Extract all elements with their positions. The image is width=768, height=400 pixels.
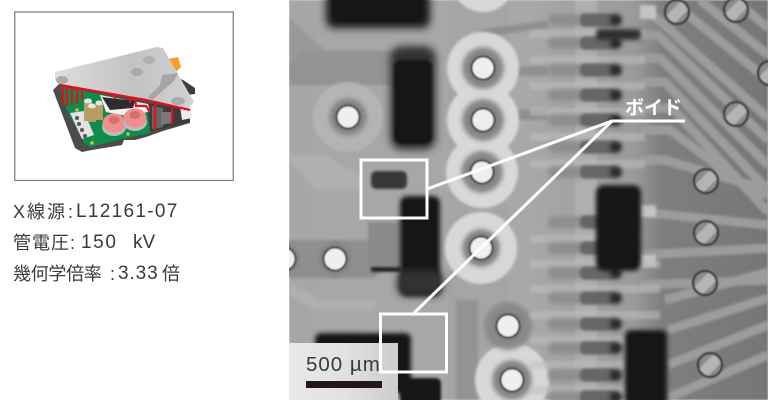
text: tube voltage: 150 [81, 232, 118, 253]
text: x-ray source: 線 [27, 202, 45, 222]
scale bar [306, 381, 382, 388]
solder legs [548, 14, 622, 400]
traces on right [640, 0, 768, 398]
scale label: 500 µm [306, 353, 381, 376]
through holes [270, 54, 526, 394]
text: tube voltage: : [70, 233, 75, 253]
text: geometric magnification: 幾何学倍率 [13, 264, 102, 284]
text: tube voltage: 電 [32, 233, 50, 253]
icon: x-ray source module [53, 47, 195, 152]
text: x-ray source: X [13, 202, 25, 222]
text: x-ray source [13, 201, 179, 222]
scale background [289, 343, 398, 400]
panel: x-ray image [289, 0, 768, 400]
text: geometric magnification: 3.33 [118, 263, 159, 284]
text: x-ray source: 源 [47, 202, 65, 222]
label: void: ボイド [625, 97, 682, 119]
panel: module illustration frame [14, 11, 234, 181]
right side holes [665, 0, 768, 377]
text: geometric magnification: 倍 [162, 264, 180, 284]
pad rings [313, 0, 549, 400]
text: tube voltage [13, 232, 155, 253]
text: tube voltage: kV [133, 232, 155, 253]
x-ray board [270, 0, 768, 400]
dark components [315, 0, 667, 400]
text: geometric magnification: : [110, 264, 115, 284]
horizontal light bands [530, 30, 660, 394]
text: tube voltage: 圧 [51, 233, 69, 253]
callout: void boxes and leaders [361, 121, 685, 372]
text: x-ray source: L12161-07 [76, 201, 179, 222]
text: tube voltage: 管 [13, 233, 31, 253]
text: x-ray source: : [68, 202, 73, 222]
text: geometric magnification [13, 263, 180, 284]
